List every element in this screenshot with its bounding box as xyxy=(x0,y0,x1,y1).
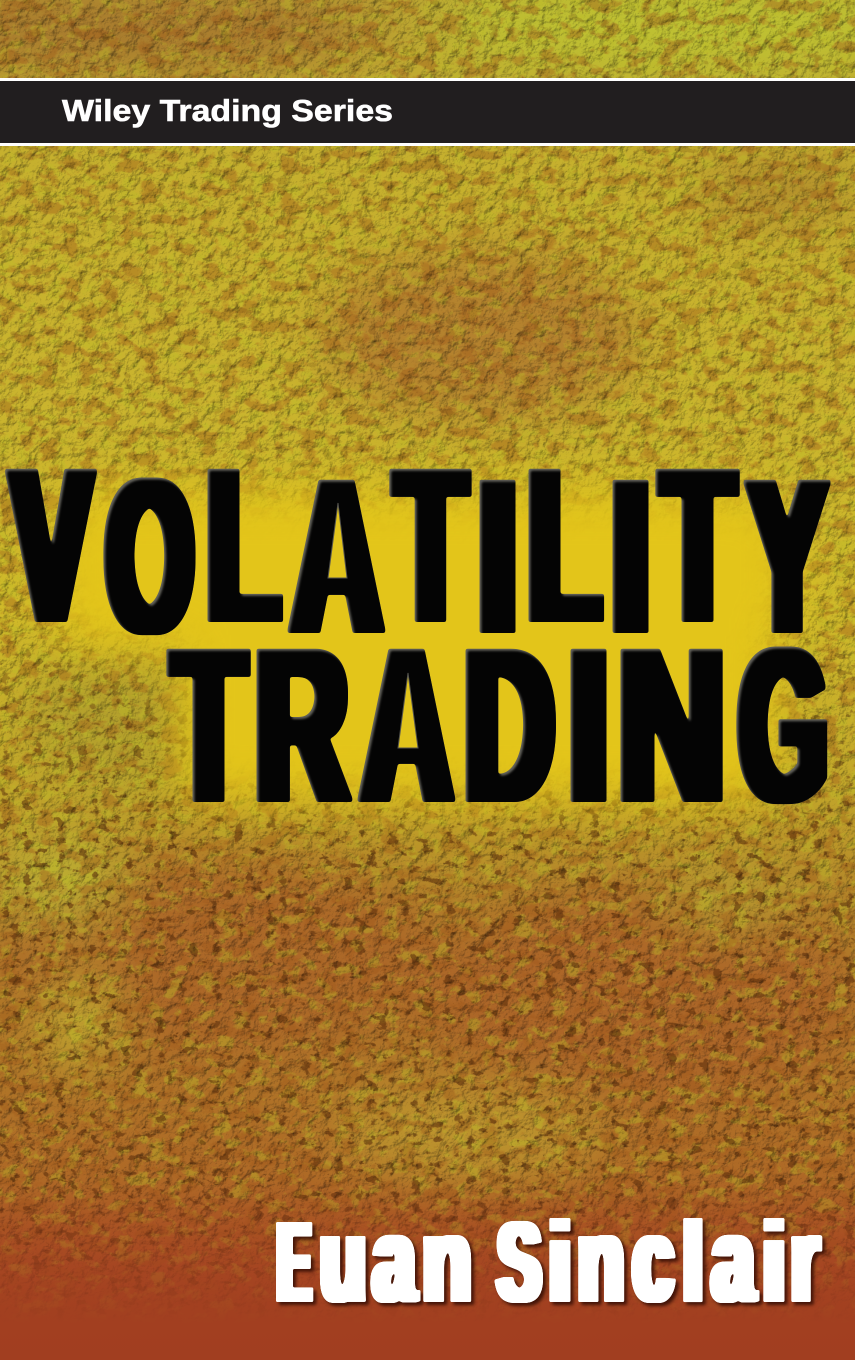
author name: i xyxy=(549,1199,571,1325)
title: Y xyxy=(749,434,825,677)
author name: n xyxy=(578,1193,624,1327)
title: A xyxy=(362,604,451,847)
series banner xyxy=(0,78,855,146)
title: L xyxy=(207,425,279,667)
author name: l xyxy=(683,1198,703,1325)
letter A openings xyxy=(328,503,418,748)
title: I xyxy=(610,436,651,678)
title: N xyxy=(618,605,725,847)
author name: r xyxy=(792,1192,818,1327)
author name: i xyxy=(763,1199,785,1325)
title: R xyxy=(256,604,347,846)
series name: Wiley Trading Series xyxy=(62,93,393,128)
author name: S xyxy=(498,1200,541,1326)
author name: E xyxy=(278,1200,310,1326)
title: T xyxy=(172,605,244,847)
title: D xyxy=(465,604,554,847)
title: V xyxy=(12,425,90,667)
title: T xyxy=(662,425,733,667)
title: L xyxy=(528,425,600,667)
title: T xyxy=(396,424,465,666)
title: G xyxy=(739,604,827,846)
title: I xyxy=(477,436,518,678)
title: A xyxy=(292,435,381,678)
title xyxy=(12,424,827,847)
author name: a xyxy=(712,1193,755,1327)
author name: a xyxy=(373,1193,416,1327)
author name: c xyxy=(633,1193,673,1328)
title: I xyxy=(568,605,609,847)
title: O xyxy=(106,435,193,678)
author name: n xyxy=(423,1192,471,1327)
author name: u xyxy=(320,1193,366,1327)
author name xyxy=(278,1192,818,1328)
